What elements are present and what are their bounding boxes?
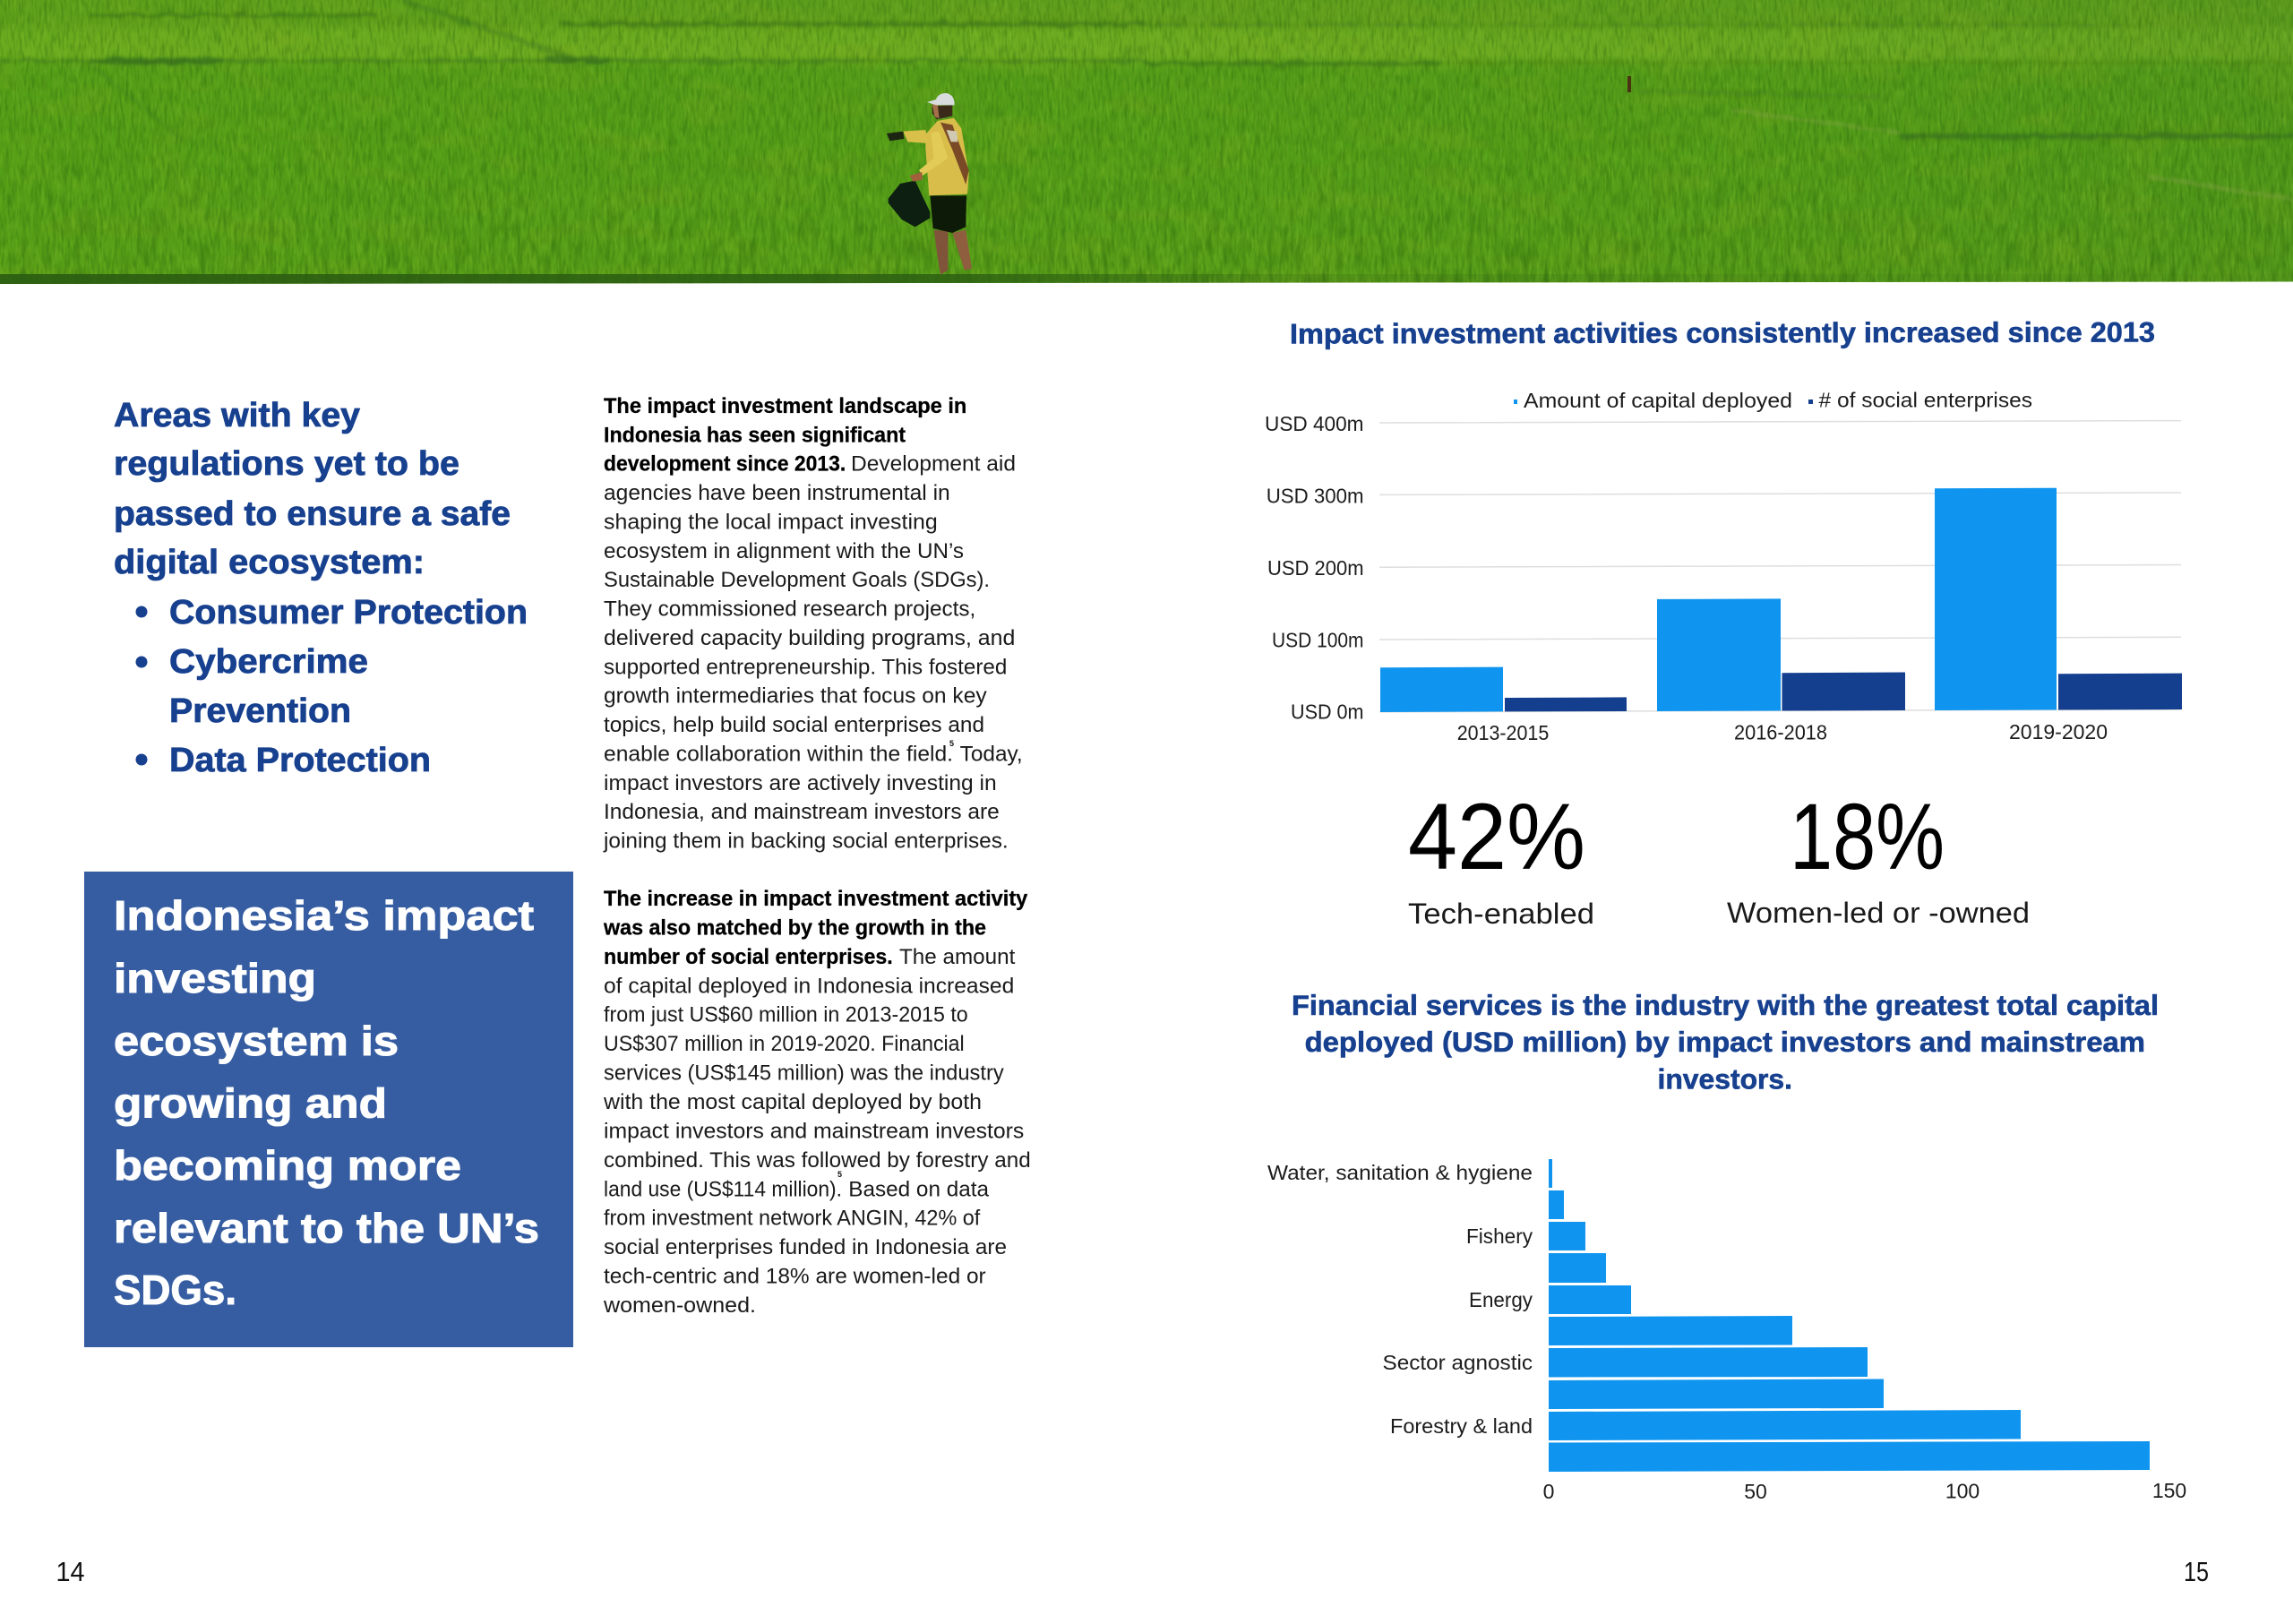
- heading: areas with key regulations: passed to ensure a safe: [114, 495, 511, 533]
- text block: growth paragraph: The increase in impact investment activity: [604, 887, 1028, 911]
- callout: ecosystem statement panel: SDGs.: [114, 1267, 236, 1313]
- x axis labels: 2019-2020: [2009, 720, 2108, 743]
- icon: farmer figure: [887, 93, 972, 275]
- y axis labels: USD 200m: [1267, 556, 1363, 580]
- stat: 42 percent tech-enabled: 42%: [1408, 785, 1585, 889]
- text block: landscape paragraph: Sustainable Development Goals (SDGs).: [604, 568, 990, 592]
- text block: landscape paragraph: 5: [949, 739, 954, 748]
- y axis labels: USD 0m: [1291, 700, 1363, 724]
- text block: landscape paragraph: The impact investment landscape in: [604, 394, 966, 418]
- legend: column chart series: [1514, 389, 2032, 412]
- list: regulation areas: [136, 594, 528, 779]
- stat: 18 percent women-led: [1727, 785, 2030, 929]
- text block: growth paragraph: from just US$60 million in 2013-2015 to: [604, 1003, 968, 1027]
- chart title: financial services: investors.: [1657, 1063, 1792, 1096]
- x axis labels: 2016-2018: [1734, 720, 1827, 743]
- text block: growth paragraph: Based on data: [848, 1177, 990, 1201]
- category labels: Fishery: [1466, 1224, 1533, 1248]
- text block: landscape paragraph: impact investors are actively investing in: [604, 771, 997, 795]
- text block: growth paragraph: services (US$145 million) was the industry: [604, 1061, 1004, 1086]
- chart title: financial services: [1292, 989, 2159, 1096]
- category labels: Energy: [1469, 1288, 1533, 1311]
- text block: growth paragraph: combined. This was followed by forestry and: [604, 1148, 1031, 1173]
- callout: ecosystem statement panel: [84, 872, 573, 1347]
- heading: areas with key regulations: regulations yet to be: [114, 445, 459, 483]
- bar chart: capital deployed and social enterprises by period: [1265, 412, 2182, 744]
- text block: growth paragraph: was also matched by the growth in the: [603, 915, 986, 940]
- category labels: Water, sanitation & hygiene: [1267, 1161, 1533, 1184]
- y axis labels: [1265, 412, 1363, 724]
- heading: areas with key regulations: Areas with key: [114, 397, 360, 434]
- text block: growth paragraph: land use (US$114 million).: [604, 1177, 842, 1201]
- text block: growth paragraph: of capital deployed in Indonesia increased: [604, 974, 1014, 998]
- chart title: investment activities: Impact investment activities consistently increased since 2013: [1290, 315, 2155, 349]
- callout: ecosystem statement panel: becoming more: [114, 1142, 461, 1189]
- text block: growth paragraph: [603, 887, 1031, 1318]
- page number: 14: 14: [56, 1556, 84, 1587]
- photo: green rice field with farmer: [0, 0, 2293, 285]
- callout: ecosystem statement panel: Indonesia’s impact: [114, 892, 534, 939]
- list: regulation areas: Cybercrime: [169, 643, 368, 681]
- text block: landscape paragraph: shaping the local impact investing: [604, 511, 938, 534]
- value axis labels: 150: [2152, 1479, 2186, 1502]
- text block: growth paragraph: from investment network ANGIN, 42% of: [604, 1207, 981, 1231]
- text block: landscape paragraph: ecosystem in alignment with the UN’s: [604, 539, 964, 563]
- bars: 2013-2015: [1380, 667, 1627, 712]
- bars: 2016-2018: [1657, 598, 1905, 711]
- category labels: Forestry & land: [1390, 1414, 1533, 1438]
- value axis labels: [1543, 1479, 2186, 1503]
- text block: growth paragraph: women-owned.: [603, 1293, 756, 1318]
- text block: landscape paragraph: delivered capacity building programs, and: [604, 626, 1015, 650]
- value axis labels: 100: [1945, 1480, 1980, 1503]
- callout: ecosystem statement panel: relevant to the UN’s: [114, 1205, 539, 1251]
- x axis labels: 2013-2015: [1457, 721, 1549, 744]
- y axis labels: USD 100m: [1272, 629, 1363, 652]
- text block: growth paragraph: 5: [837, 1170, 842, 1179]
- callout: ecosystem statement panel: investing: [114, 955, 316, 1001]
- text block: growth paragraph: The amount: [899, 945, 1016, 969]
- y axis labels: USD 300m: [1267, 484, 1363, 507]
- text block: landscape paragraph: agencies have been instrumental in: [604, 481, 950, 505]
- text block: landscape paragraph: growth intermediaries that focus on key: [604, 684, 987, 709]
- heading: areas with key regulations: digital ecosystem:: [114, 544, 425, 581]
- stat: 18 percent women-led: 18%: [1790, 785, 1945, 889]
- text block: landscape paragraph: joining them in backing social enterprises.: [603, 829, 1009, 853]
- page number: 15: 15: [2184, 1556, 2209, 1587]
- bars: industries: [1549, 1159, 2150, 1472]
- text block: landscape paragraph: development since 2013.: [604, 452, 846, 477]
- text block: landscape paragraph: They commissioned research projects,: [604, 597, 975, 622]
- text block: landscape paragraph: supported entrepreneurship. This fostered: [604, 655, 1007, 679]
- chart title: financial services: Financial services is the industry with the greatest total capital: [1292, 989, 2159, 1021]
- callout: ecosystem statement panel: ecosystem is: [114, 1018, 399, 1064]
- bar chart: capital by industry: [1267, 1159, 2186, 1503]
- value axis labels: 50: [1744, 1480, 1767, 1503]
- category labels: [1267, 1161, 1533, 1438]
- text block: landscape paragraph: topics, help build social enterprises and: [604, 713, 984, 737]
- stat: 42 percent tech-enabled: Tech-enabled: [1408, 898, 1594, 930]
- legend: column chart series: # of social enterprises: [1818, 389, 2032, 412]
- list: regulation areas: Consumer Protection: [169, 594, 528, 632]
- text block: landscape paragraph: Indonesia, and mainstream investors are: [604, 800, 1000, 824]
- text block: landscape paragraph: Today,: [960, 742, 1023, 766]
- callout: ecosystem statement panel: growing and: [114, 1080, 387, 1127]
- y axis labels: USD 400m: [1265, 412, 1363, 435]
- bars: 2019-2020: [1935, 488, 2182, 710]
- legend: column chart series: Amount of capital deployed: [1524, 389, 1792, 412]
- x axis labels: [1457, 720, 2108, 744]
- text block: landscape paragraph: enable collaboration within the field.: [604, 742, 953, 766]
- text block: landscape paragraph: Indonesia has seen significant: [604, 423, 906, 447]
- text block: growth paragraph: tech-centric and 18% are women-led or: [604, 1265, 986, 1289]
- text block: landscape paragraph: Development aid: [851, 452, 1016, 477]
- list: regulation areas: Prevention: [169, 692, 351, 730]
- text block: landscape paragraph: [603, 394, 1023, 853]
- heading: areas with key regulations: [114, 397, 511, 581]
- text block: growth paragraph: social enterprises funded in Indonesia are: [604, 1235, 1007, 1259]
- list: regulation areas: Data Protection: [169, 742, 431, 779]
- text block: growth paragraph: impact investors and mainstream investors: [604, 1119, 1024, 1143]
- value axis labels: 0: [1543, 1480, 1554, 1503]
- text block: growth paragraph: with the most capital deployed by both: [603, 1090, 982, 1114]
- stat: 18 percent women-led: Women-led or -owned: [1727, 897, 2030, 929]
- text block: growth paragraph: US$307 million in 2019-2020. Financial: [604, 1032, 965, 1056]
- category labels: Sector agnostic: [1383, 1351, 1533, 1374]
- chart title: financial services: deployed (USD million) by impact investors and mainstream: [1305, 1026, 2145, 1058]
- text block: growth paragraph: number of social enterprises.: [604, 945, 893, 969]
